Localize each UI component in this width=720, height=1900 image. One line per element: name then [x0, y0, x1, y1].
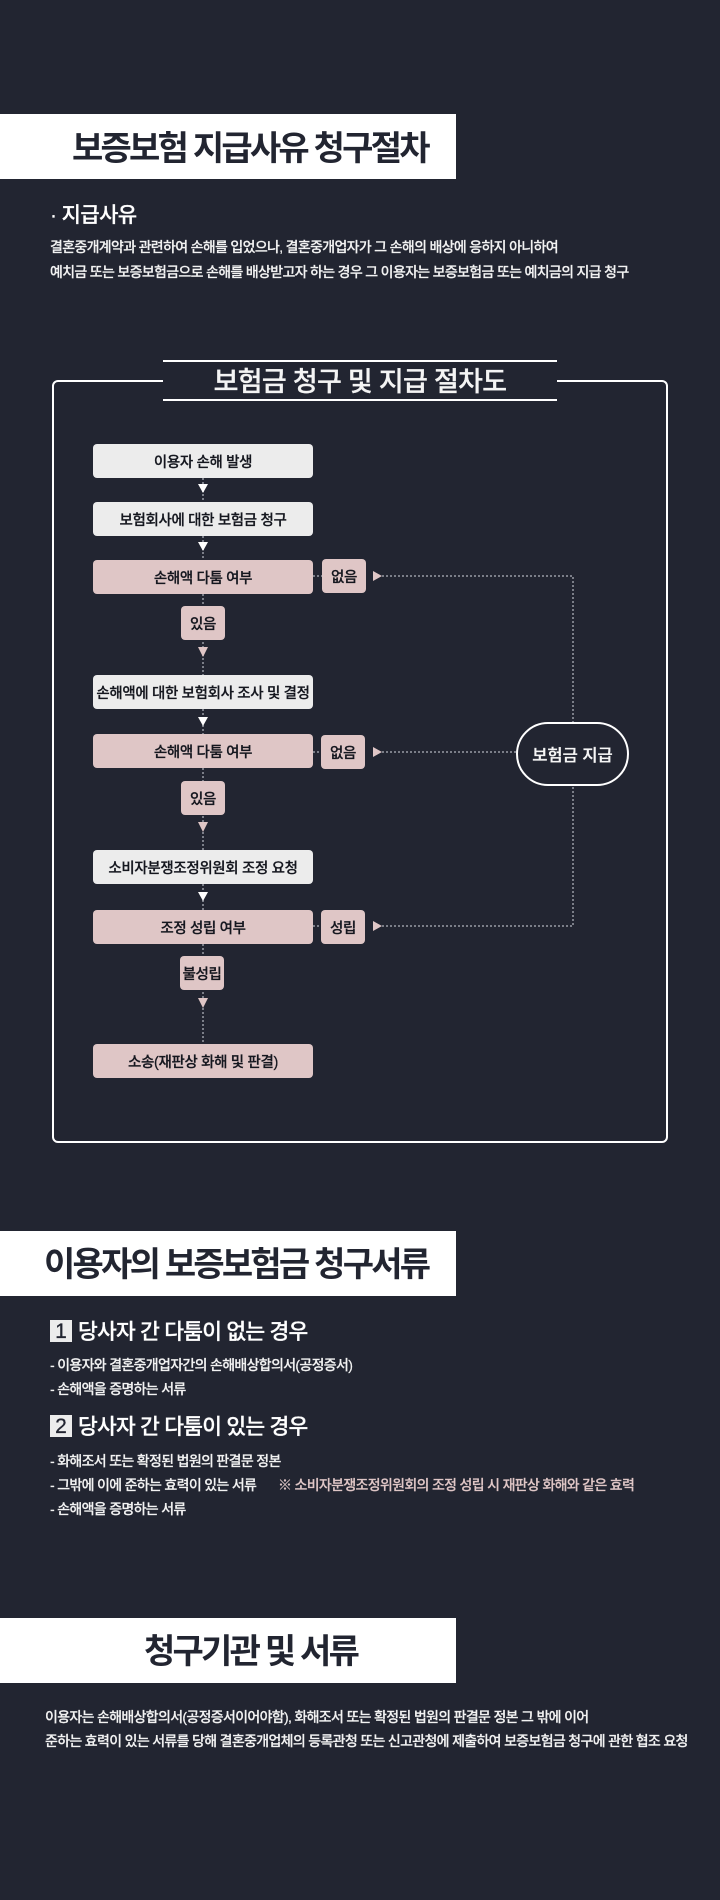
- text block: claim institution: [45, 1709, 688, 1749]
- tag: 없음: [321, 735, 365, 769]
- step: 소송: 소송(재판상 화해 및 판결): [128, 1055, 278, 1071]
- text block: case 2 documents: - 손해액을 증명하는 서류: [50, 1501, 186, 1517]
- decision: 손해액 다툼 여부: [93, 560, 313, 594]
- tag: 성립: 성립: [330, 921, 356, 937]
- subheading: case 1: 당사자 간 다툼이 없는 경우: [78, 1320, 307, 1344]
- step: 소송: [93, 1044, 313, 1078]
- tag: 있음: 있음: [190, 617, 216, 633]
- result pill: 보험금 지급: [516, 722, 629, 786]
- heading: 지급사유: · 지급사유: [50, 204, 137, 227]
- decision: 조정 성립 여부: 조정 성립 여부: [160, 921, 246, 937]
- title bar: 이용자의 보증보험금 청구서류: [0, 1231, 456, 1296]
- text block: payment reason: 결혼중개계약과 관련하여 손해를 입었으나, 결혼중개업자가 그 손해의 배상에 응하지 아니하여: [50, 239, 558, 255]
- text block: case 1 documents: - 이용자와 결혼중개업자간의 손해배상합의서(공정증서): [50, 1357, 352, 1373]
- tag: 있음: [181, 606, 225, 640]
- text block: claim institution: 준하는 효력이 있는 서류를 당해 결혼중개업체의 등록관청 또는 신고관청에 제출하여 보증보험금 청구에 관한 협조 요청: [45, 1733, 688, 1749]
- decision: 손해액 다툼 여부: 손해액 다툼 여부: [154, 745, 252, 761]
- text block: case 2 documents: - 화해조서 또는 확정된 법원의 판결문 정본: [50, 1453, 281, 1469]
- step: 보험회사에 대한 보험금 청구: [93, 502, 313, 536]
- text block: payment reason: [50, 239, 629, 280]
- number badge 1: [50, 1320, 72, 1342]
- title bar: 청구기관 및 서류: 청구기관 및 서류: [144, 1633, 357, 1671]
- tag: 성립: [321, 910, 365, 944]
- text block: payment reason: 예치금 또는 보증보험금으로 손해를 배상받고자 하는 경우 그 이용자는 보증보험금 또는 예치금의 지급 청구: [50, 264, 629, 280]
- title bar: 보증보험 지급사유 청구절차: 보증보험 지급사유 청구절차: [72, 130, 428, 168]
- number badge 2: 2: [55, 1415, 67, 1438]
- tag: 있음: [181, 781, 225, 815]
- step: 손해액에 대한 보험회사 조사 및 결정: 손해액에 대한 보험회사 조사 및 결정: [96, 686, 310, 702]
- callout note: ※ 소비자분쟁조정위원회의 조정 성립 시 재판상 화해와 같은 효력: [278, 1477, 634, 1493]
- text block: case 2 documents: - 그밖에 이에 준하는 효력이 있는 서류: [50, 1477, 256, 1493]
- panel border: [52, 380, 668, 1143]
- chart heading: 보험금 청구 및 지급 절차도: 보험금 청구 및 지급 절차도: [214, 367, 506, 397]
- text block: case 1 documents: - 손해액을 증명하는 서류: [50, 1381, 186, 1397]
- tag: 있음: 있음: [190, 792, 216, 808]
- text block: case 2 documents: [50, 1453, 634, 1517]
- chart heading: 보험금 청구 및 지급 절차도: [163, 360, 557, 401]
- result pill: 보험금 지급: 보험금 지급: [532, 747, 613, 765]
- tag: 없음: 없음: [331, 570, 357, 586]
- tag: 없음: 없음: [330, 746, 356, 762]
- tag: 불성립: [180, 956, 224, 990]
- decision: 손해액 다툼 여부: 손해액 다툼 여부: [154, 571, 252, 587]
- step: 이용자 손해 발생: 이용자 손해 발생: [154, 455, 252, 471]
- step: 이용자 손해 발생: [93, 444, 313, 478]
- decision: 조정 성립 여부: [93, 910, 313, 944]
- text block: case 1 documents: [50, 1357, 352, 1397]
- text block: claim institution: 이용자는 손해배상합의서(공정증서이어야함), 화해조서 또는 확정된 법원의 판결문 정본 그 밖에 이어: [45, 1709, 588, 1725]
- number badge 2: [50, 1415, 72, 1437]
- decision: 손해액 다툼 여부: [93, 734, 313, 768]
- tag: 불성립: 불성립: [182, 967, 221, 983]
- number badge 1: 1: [55, 1320, 67, 1343]
- step: 손해액에 대한 보험회사 조사 및 결정: [93, 675, 313, 709]
- title bar: 보증보험 지급사유 청구절차: [0, 114, 456, 179]
- step: 보험회사에 대한 보험금 청구: 보험회사에 대한 보험금 청구: [120, 513, 286, 529]
- subheading: case 2: 당사자 간 다툼이 있는 경우: [78, 1415, 307, 1439]
- title bar: 이용자의 보증보험금 청구서류: 이용자의 보증보험금 청구서류: [44, 1246, 428, 1284]
- title bar: 청구기관 및 서류: [0, 1618, 456, 1683]
- step: 소비자분쟁조정위원회 조정 요청: 소비자분쟁조정위원회 조정 요청: [108, 861, 298, 877]
- tag: 없음: [322, 559, 366, 593]
- step: 소비자분쟁조정위원회 조정 요청: [93, 850, 313, 884]
